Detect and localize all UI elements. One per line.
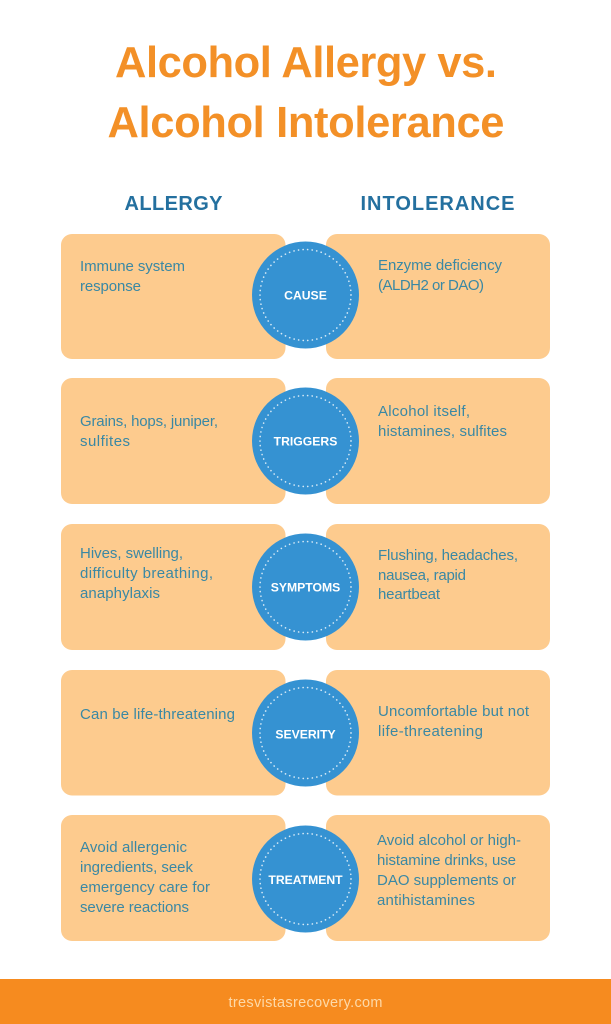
panel: treatment allergy: severe reactions: [80, 899, 189, 916]
row: symptoms: [61, 524, 550, 650]
footer bar: tresvistasrecovery.com: [228, 995, 382, 1011]
panel: severity intolerance: Uncomfortable but not: [378, 703, 530, 720]
badge: treatment: TREATMENT: [268, 873, 343, 887]
panel: cause intolerance: Enzyme deficiency: [378, 257, 502, 274]
panel: symptoms allergy: Hives, swelling,: [80, 545, 183, 562]
panel: severity allergy: Can be life-threatening: [80, 706, 235, 723]
panel: cause allergy: [61, 234, 286, 359]
title: Alcohol Allergy vs.: [115, 39, 497, 87]
badge: triggers: [252, 388, 359, 494]
panel: treatment allergy: emergency care for: [80, 879, 210, 896]
panel: severity allergy: [61, 670, 286, 796]
panel: symptoms allergy: [61, 524, 286, 650]
panel: symptoms intolerance: [326, 524, 550, 650]
badge: triggers: TRIGGERS: [274, 434, 337, 448]
badge: cause: CAUSE: [284, 288, 327, 302]
panel: triggers allergy: Grains, hops, juniper,: [80, 413, 218, 430]
panel: treatment intolerance: DAO supplements or: [377, 872, 516, 889]
badge: severity: [252, 680, 359, 786]
panel: severity intolerance: [326, 670, 550, 796]
panel: triggers allergy: [61, 378, 286, 504]
panel: triggers allergy: sulfites: [80, 433, 130, 450]
title: Alcohol Intolerance: [108, 99, 504, 147]
panel: cause intolerance: (ALDH2 or DAO): [378, 277, 484, 294]
panel: triggers intolerance: Alcohol itself,: [378, 403, 470, 420]
column heading: allergy: ALLERGY: [124, 193, 223, 215]
panel: cause allergy: response: [80, 278, 141, 295]
panel: symptoms intolerance: Flushing, headaches,: [378, 547, 518, 564]
footer bar: [0, 979, 611, 1024]
panel: cause intolerance: [326, 234, 550, 359]
panel: triggers intolerance: [326, 378, 550, 504]
row: triggers: [61, 378, 550, 504]
row: treatment: [61, 815, 550, 941]
badge: symptoms: [252, 534, 359, 640]
row: cause: [61, 234, 550, 359]
badge: cause: [252, 242, 359, 348]
panel: treatment allergy: ingredients, seek: [80, 859, 194, 876]
panel: treatment intolerance: histamine drinks, use: [377, 852, 516, 869]
panel: treatment intolerance: [326, 815, 550, 941]
row: severity: [61, 670, 550, 796]
panel: symptoms allergy: anaphylaxis: [80, 585, 160, 602]
panel: symptoms intolerance: nausea, rapid: [378, 567, 466, 584]
panel: symptoms allergy: difficulty breathing,: [80, 565, 213, 582]
panel: symptoms intolerance: heartbeat: [378, 586, 441, 603]
panel: triggers intolerance: histamines, sulfites: [378, 423, 507, 440]
badge: severity: SEVERITY: [275, 728, 336, 742]
badge: symptoms: SYMPTOMS: [271, 580, 340, 594]
badge: treatment: [252, 826, 359, 932]
panel: treatment intolerance: Avoid alcohol or high-: [377, 832, 521, 849]
title: [108, 39, 504, 147]
panel: treatment allergy: [61, 815, 286, 941]
panel: treatment intolerance: antihistamines: [377, 892, 475, 909]
column heading: intolerance: INTOLERANCE: [360, 193, 514, 215]
panel: treatment allergy: Avoid allergenic: [80, 839, 188, 856]
panel: severity intolerance: life-threatening: [378, 723, 483, 740]
panel: cause allergy: Immune system: [80, 258, 185, 275]
